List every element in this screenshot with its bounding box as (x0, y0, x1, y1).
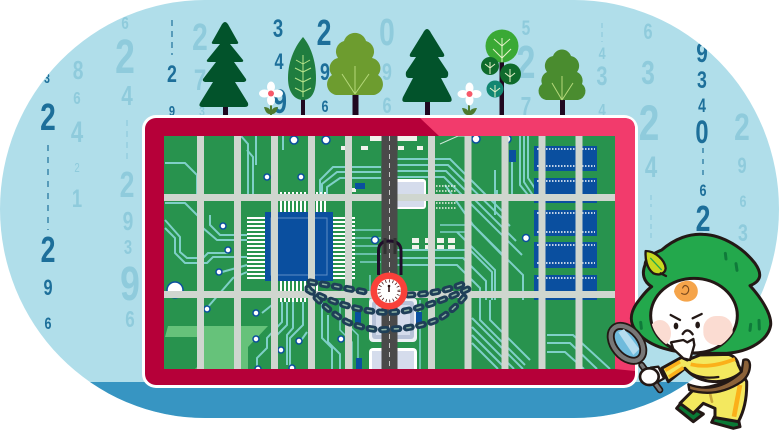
light digit rain: 7 (194, 63, 206, 97)
dark digit rain: 9 (696, 38, 708, 69)
light digit rain: 4 (599, 44, 606, 64)
circuit board screen (164, 135, 615, 373)
dark digit rain: 3 (44, 70, 50, 86)
pine tree right (402, 29, 452, 116)
dark digit rain: 4 (275, 50, 284, 75)
light digit rain (71, 12, 750, 333)
main chip (247, 192, 355, 302)
pants (680, 372, 747, 422)
dark digit rain: 9 (169, 102, 175, 119)
light digit rain: 4 (121, 81, 133, 112)
light digit rain: 4 (598, 101, 606, 121)
multi-crown tree (481, 30, 521, 116)
light digit rain: 9 (123, 206, 133, 236)
dark digit rain: 2 (317, 12, 331, 53)
dark digit rain: 2 (167, 62, 177, 88)
light digit rain: 6 (73, 89, 81, 109)
hood (631, 234, 771, 353)
light digit rain: 0 (379, 12, 395, 54)
light digit rain: 9 (120, 257, 140, 310)
dark digit rain: 3 (697, 68, 707, 94)
light digit rain: 3 (738, 221, 748, 247)
dark digit rain: 9 (44, 276, 53, 301)
light digit rain: 7 (521, 91, 531, 121)
dark digit rain: 6 (45, 314, 51, 334)
light digit rain: 2 (74, 162, 80, 175)
light digit rain: 3 (199, 103, 205, 119)
mascot character (604, 234, 771, 428)
small components (341, 136, 456, 249)
light digit rain: 8 (73, 55, 84, 85)
padlock dial (370, 272, 408, 310)
light digit rain: 6 (383, 94, 392, 119)
dark digit rain: 2 (40, 97, 56, 139)
flower left (259, 82, 283, 115)
padlock shackle (378, 238, 401, 275)
hair curl (674, 281, 698, 302)
dark digit rain: 2 (41, 229, 55, 270)
light digit rain: 2 (192, 17, 208, 59)
light digit rain: 2 (517, 36, 535, 88)
flower right (458, 82, 482, 115)
hand on handle (640, 367, 664, 385)
light digit rain: 6 (121, 14, 129, 34)
light digit rain: 3 (641, 56, 655, 92)
vias (167, 135, 530, 372)
dark digit rain: 0 (695, 115, 709, 150)
light digit rain: 4 (645, 150, 657, 184)
boots (677, 402, 740, 428)
round olive tree (327, 33, 383, 116)
belt (688, 359, 750, 393)
dark digit rain: 4 (698, 95, 707, 117)
memory modules (534, 146, 597, 300)
round green tree (538, 50, 586, 116)
light digit rain: 1 (72, 184, 82, 213)
dark digit rain: 9 (273, 83, 287, 121)
light digit rain: 2 (115, 30, 135, 83)
dark digit rain: 9 (320, 60, 330, 86)
light green patch (165, 326, 268, 369)
leaf (646, 251, 666, 276)
dark digit rain: 6 (322, 97, 328, 117)
face (651, 278, 737, 353)
circuit traces (165, 136, 610, 369)
pine tree left (199, 22, 248, 116)
light digit rain: 5 (522, 16, 530, 40)
light digit rain: 4 (71, 115, 83, 149)
light digit rain: 6 (125, 308, 135, 333)
light digit rain: 2 (639, 96, 659, 151)
thumb hand (671, 339, 694, 360)
shirt and arm (662, 354, 742, 382)
light digit rain: 6 (740, 192, 746, 212)
dark digit rain: 6 (700, 181, 706, 201)
dark digit rain: 2 (696, 198, 710, 239)
dashed digit streams (48, 20, 703, 240)
light digit rain: 9 (382, 60, 392, 86)
light digit rain: 3 (124, 236, 132, 259)
grey grid bars (164, 136, 615, 369)
silver components (355, 150, 516, 373)
magnifier (604, 320, 660, 390)
cypress tree (288, 37, 316, 116)
eyes and mouth (671, 314, 702, 334)
central dark cable (382, 136, 398, 369)
light digit rain: 6 (644, 20, 653, 45)
tablet frame (142, 115, 638, 388)
light digit rain: 3 (596, 61, 608, 92)
dark digit rain (40, 12, 710, 334)
light digit rain: 2 (734, 107, 750, 149)
chains (308, 282, 470, 330)
light digit rain: 2 (120, 164, 134, 205)
light digit rain: 9 (738, 154, 747, 179)
dark digit rain: 3 (273, 14, 283, 43)
